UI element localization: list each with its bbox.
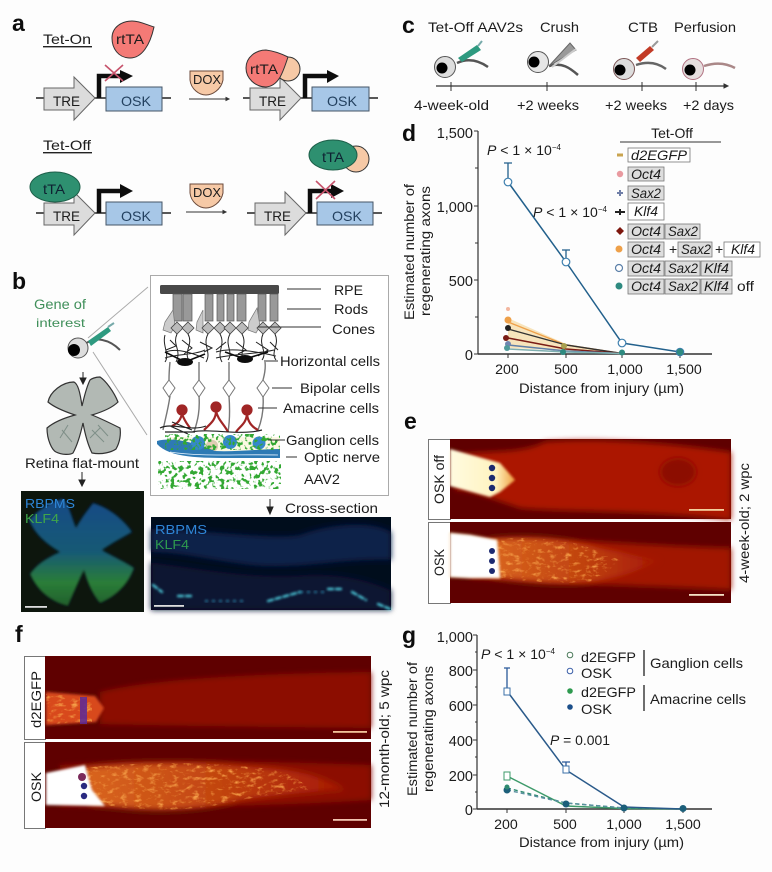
timeline labels: +2 days (683, 97, 734, 113)
icon: eye with forceps (528, 43, 578, 75)
y tick labels: 1,500 (437, 126, 473, 142)
construct: Tet-On with dox (243, 50, 378, 120)
panel e: optic nerve images (404, 408, 752, 604)
panel g: chart (402, 622, 746, 850)
image: OSK (24, 742, 371, 828)
label g: g (402, 622, 416, 648)
dox icon bottom (190, 184, 223, 208)
y tick labels (437, 630, 473, 819)
image: d2EGFP (24, 656, 371, 740)
x tick labels (494, 817, 701, 833)
x tick labels: 1,000 (606, 817, 642, 833)
legend: d2EGFP (581, 649, 636, 665)
axes (473, 635, 712, 813)
image: flat mount fluorescence (21, 491, 144, 612)
timeline labels (414, 97, 734, 113)
axes (474, 131, 712, 358)
y tick labels: 400 (449, 734, 473, 750)
legend: Sax2 (631, 185, 661, 201)
legend: Klf4 (704, 278, 729, 294)
legend: OSK (581, 701, 613, 717)
legend: Oct4 (631, 260, 661, 276)
retina labels: Optic nerve (304, 449, 380, 465)
y tick labels: 1,000 (437, 200, 473, 216)
x tick labels: 1,500 (665, 817, 701, 833)
panel a: Tet-On and Tet-Off schematics (12, 10, 382, 235)
image: flat mount fluorescence: RBPMS (25, 496, 75, 511)
legend: d2EGFP (631, 147, 688, 163)
y tick labels: 200 (449, 769, 473, 785)
panel c: timeline (402, 12, 736, 113)
legend: Sax2 (668, 260, 698, 276)
retina labels: Rods (334, 301, 368, 317)
age label: 4-week-old; 2 wpc (736, 463, 752, 583)
construct: Tet-Off without dox: OSK (121, 208, 152, 224)
timeline headings: CTB (628, 19, 658, 35)
y axis title: regenerating axons (421, 666, 436, 792)
legend: Ganglion cells (650, 655, 743, 671)
data lines (504, 668, 683, 809)
y tick labels: 800 (449, 664, 473, 680)
legend: Oct4 (631, 278, 661, 294)
x tick labels: 1,000 (607, 362, 643, 378)
age label: 12-month-old; 5 wpc (376, 670, 392, 808)
legend: Sax2 (668, 223, 698, 239)
legend: off (737, 278, 754, 294)
retina labels (258, 282, 380, 487)
bipolar cells (163, 362, 269, 432)
y tick labels (437, 126, 473, 364)
construct: Tet-Off without dox: TRE (53, 208, 80, 224)
arrow (80, 372, 86, 384)
image: retina cross-section (151, 517, 391, 610)
legend: + (669, 241, 677, 257)
legend: Oct4 (631, 223, 661, 239)
image: d2EGFP: d2EGFP (29, 671, 44, 728)
construct: Tet-Off with dox: TRE (264, 208, 291, 224)
y tick labels: 1,000 (437, 630, 473, 646)
y tick labels: 0 (465, 803, 473, 819)
timeline labels: +2 weeks (517, 97, 579, 113)
x tick labels: 200 (495, 362, 519, 378)
icon: flat-mount clover (47, 377, 120, 454)
P value: −4 (546, 647, 556, 656)
P value: −4 (598, 205, 608, 214)
x tick labels: 500 (554, 362, 578, 378)
P value: P = 0.001 (550, 732, 610, 748)
y axis title: Estimated number of (402, 184, 417, 320)
y axis title: Estimated number of (405, 662, 420, 796)
x axis title: Distance from injury (µm) (519, 380, 684, 396)
legend (567, 649, 746, 717)
y tick labels: 600 (449, 699, 473, 715)
legend: Oct4 (631, 166, 661, 182)
arrow (79, 472, 85, 486)
photoreceptor nuclei and synapses (171, 322, 281, 334)
legend: Oct4 (631, 241, 661, 257)
legend: Klf4 (704, 260, 729, 276)
image: OSK off (428, 439, 731, 520)
tTA bound to dox: tTA (322, 149, 345, 165)
legend: Tet-Off (651, 125, 693, 141)
legend: Klf4 (634, 203, 658, 219)
OSK series (504, 163, 684, 356)
rtTA unbound (112, 21, 154, 58)
label f: f (15, 621, 23, 647)
P value: P < 1 × 10 (533, 204, 598, 220)
cross-section label: Cross-section (285, 500, 378, 516)
y axis title (402, 184, 433, 320)
image: OSK (428, 522, 731, 604)
label a: a (12, 10, 25, 36)
legend: Sax2 (681, 241, 711, 257)
construct: Tet-Off without dox (30, 172, 171, 235)
construct: Tet-Off with dox: OSK (332, 208, 363, 224)
y axis title (405, 662, 436, 796)
y axis title: regenerating axons (418, 186, 433, 316)
timeline headings (428, 19, 736, 35)
legend: Amacrine cells (650, 691, 746, 707)
dox icon top: DOX (193, 72, 221, 87)
construct: Tet-On with dox: OSK (327, 93, 358, 109)
construct: Tet-On without dox: TRE (53, 93, 80, 109)
cones (163, 308, 260, 333)
rods (173, 294, 278, 321)
legend (615, 125, 760, 294)
low series band (508, 318, 622, 353)
legend: + (715, 241, 723, 257)
timeline headings: Perfusion (674, 19, 736, 35)
horizontal cells (165, 352, 268, 366)
icon: perfused eye (682, 58, 735, 80)
heading Tet-Off: Tet-Off (43, 137, 91, 153)
image: retina cross-section: RBPMS (155, 522, 207, 537)
y tick labels: 0 (465, 348, 473, 364)
image: OSK: OSK (29, 772, 44, 802)
retina labels: RPE (334, 282, 363, 298)
x tick labels: 1,500 (666, 362, 702, 378)
ganglion cells and optic nerve (157, 434, 280, 458)
timeline labels: +2 weeks (605, 97, 667, 113)
label b: b (12, 268, 26, 294)
x tick labels (495, 362, 702, 378)
construct: Tet-On with dox: rtTA (250, 61, 279, 77)
legend: d2EGFP (581, 684, 636, 700)
dox icon bottom: DOX (193, 185, 221, 200)
timeline labels: 4-week-old (414, 97, 489, 113)
RPE layer (160, 285, 279, 294)
legend: Klf4 (731, 241, 755, 257)
panel b: retina (12, 268, 391, 612)
AAV2 particles (158, 461, 281, 489)
dox icon top (190, 71, 223, 95)
timeline axis (436, 82, 728, 91)
data markers (504, 688, 686, 812)
icon: eye with syringe (68, 323, 120, 358)
label c: c (402, 12, 415, 38)
arrow (186, 210, 226, 214)
x axis title: Distance from injury (µm) (519, 834, 684, 850)
label e: e (404, 408, 417, 434)
retina labels: Ganglion cells (286, 432, 379, 448)
retina labels: Cones (332, 321, 375, 337)
construct: Tet-On without dox (36, 65, 171, 120)
gene of interest label (34, 297, 86, 330)
x tick labels: 200 (494, 817, 518, 833)
construct: Tet-On without dox: OSK (121, 93, 152, 109)
P value: −4 (552, 143, 562, 152)
panel: retina diagram (150, 276, 388, 496)
timeline headings: Tet-Off AAV2s (428, 19, 523, 35)
image: OSK: OSK (432, 549, 447, 576)
flat-mount label: Retina flat-mount (25, 455, 139, 471)
low series lines (508, 322, 622, 354)
P value: P < 1 × 10 (487, 142, 552, 158)
amacrine cells (160, 402, 262, 451)
zoom lines (88, 287, 148, 435)
arrow (189, 98, 229, 100)
timeline headings: Crush (540, 19, 579, 35)
icon: eye with green syringe (434, 41, 488, 78)
P value: P < 1 × 10 (481, 646, 546, 662)
icon: eye with red syringe (614, 41, 666, 80)
legend: OSK (581, 665, 613, 681)
construct: Tet-Off without dox: tTA (43, 181, 66, 197)
gene of interest label: Gene of (34, 297, 86, 312)
y tick labels: 500 (449, 274, 473, 290)
tTA bound to dox (309, 140, 369, 172)
panel f: optic nerve images aged (15, 621, 392, 828)
panel d: chart (402, 120, 760, 396)
gene of interest label: interest (36, 316, 86, 330)
retina labels: Bipolar cells (300, 380, 380, 396)
construct: Tet-Off with dox (247, 181, 382, 235)
heading Tet-On: Tet-On (43, 31, 91, 47)
retina labels: Horizontal cells (280, 353, 380, 369)
construct: Tet-On with dox: TRE (259, 93, 286, 109)
rtTA unbound: rtTA (116, 31, 145, 47)
x tick labels: 500 (553, 817, 577, 833)
retina labels: Amacrine cells (283, 400, 379, 416)
image: OSK off: OSK off (432, 455, 447, 504)
retina labels: AAV2 (304, 471, 340, 487)
image: flat mount fluorescence: KLF4 (25, 511, 59, 526)
label d: d (402, 120, 416, 146)
image: retina cross-section: KLF4 (155, 537, 189, 552)
legend: Sax2 (668, 278, 698, 294)
low series markers (503, 307, 625, 356)
